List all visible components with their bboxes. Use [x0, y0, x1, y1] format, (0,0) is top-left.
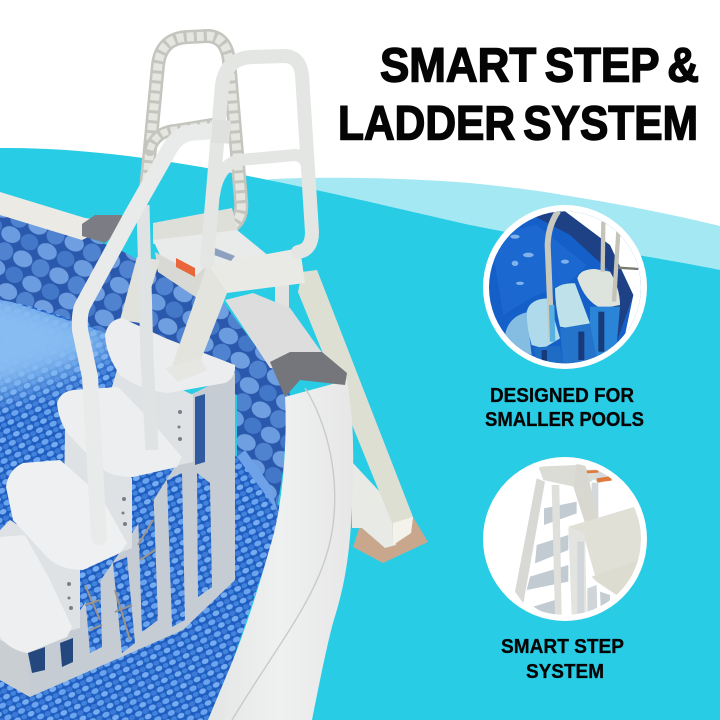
title — [338, 40, 699, 150]
rim connector: left — [82, 215, 122, 243]
support ramp outside the pool — [275, 270, 428, 563]
ladder: orange label — [176, 258, 195, 277]
step 2 — [57, 387, 182, 477]
middle handle bar — [214, 155, 308, 195]
circle photo content — [489, 211, 641, 364]
platform tread stripes — [214, 248, 235, 261]
steps frame windows — [28, 394, 212, 673]
step grey inner bracing — [85, 520, 155, 640]
pool liner: lower wall lighter patch — [237, 450, 278, 512]
large rim: seam line — [232, 388, 335, 720]
left sloped handrail — [80, 131, 214, 537]
photo: pool and step system — [0, 36, 428, 720]
pool liner: floor — [0, 290, 283, 720]
circle label: designed for smaller pools: SMALLER POOLS — [485, 409, 644, 431]
top rim: left section — [0, 192, 120, 240]
step post bracket — [165, 358, 207, 382]
pool liner: light floor centre — [0, 300, 116, 412]
step 3 — [6, 460, 127, 570]
post leg left — [120, 257, 160, 323]
handrails — [80, 56, 312, 537]
wave: turquoise background — [0, 148, 720, 720]
platform front face — [207, 248, 305, 293]
platform side under — [155, 252, 227, 300]
platform top surface — [153, 230, 270, 279]
circle photo: designed for smaller pools — [483, 205, 647, 369]
circle label: smart step system: SMART STEP — [501, 636, 624, 658]
circle label: designed for smaller pools — [485, 385, 644, 431]
large rim: front curved section — [208, 380, 353, 720]
step risers — [0, 360, 193, 697]
front ladder leg — [170, 265, 227, 375]
post collar — [220, 120, 222, 143]
front handle frame — [207, 56, 312, 262]
circle label: smart step system — [501, 636, 624, 683]
circle photo content — [515, 463, 642, 616]
platform back wall — [153, 208, 238, 244]
step frame bolt holes — [67, 410, 182, 610]
circle photo: smart step system — [483, 457, 647, 621]
step 4 — [0, 535, 72, 653]
rim connector: right — [270, 352, 347, 397]
circle border — [483, 457, 647, 621]
circle label: smart step system: SYSTEM — [526, 661, 604, 683]
ladder: rear ribbed frame — [146, 36, 241, 226]
pool liner: pebble wall — [0, 213, 290, 510]
top rim: middle section — [225, 293, 345, 378]
rear post — [143, 205, 152, 450]
title line 1: SMART STEP & — [380, 40, 699, 92]
circle border — [483, 205, 647, 369]
wave: light aqua band — [262, 178, 720, 280]
steps riser frame — [0, 373, 235, 697]
step 1 (top) — [105, 318, 235, 393]
circle label: designed for smaller pools: DESIGNED FOR — [490, 385, 635, 407]
